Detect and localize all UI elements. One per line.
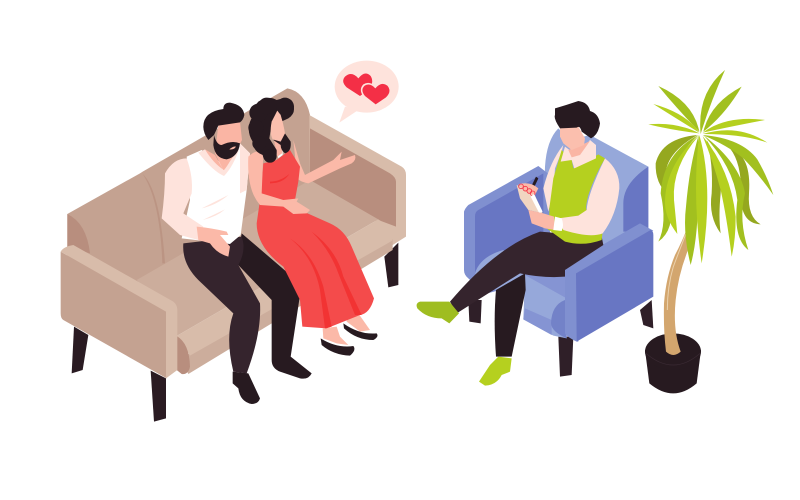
plant trunk: [664, 200, 697, 355]
sofa: [61, 88, 406, 422]
plant pot: [645, 333, 701, 393]
plant leaves: [648, 70, 773, 265]
therapist torso and head: [517, 101, 619, 244]
man's head: [198, 103, 244, 176]
therapist: [417, 101, 619, 386]
man on sofa: [162, 103, 312, 404]
woman's head: [248, 98, 294, 163]
speech bubble with hearts: [335, 61, 399, 123]
potted plant: [645, 70, 773, 393]
armchair: [464, 128, 653, 377]
woman on sofa: [248, 98, 377, 356]
icon: hearts: [343, 73, 390, 106]
notebook and hands: [517, 177, 563, 231]
